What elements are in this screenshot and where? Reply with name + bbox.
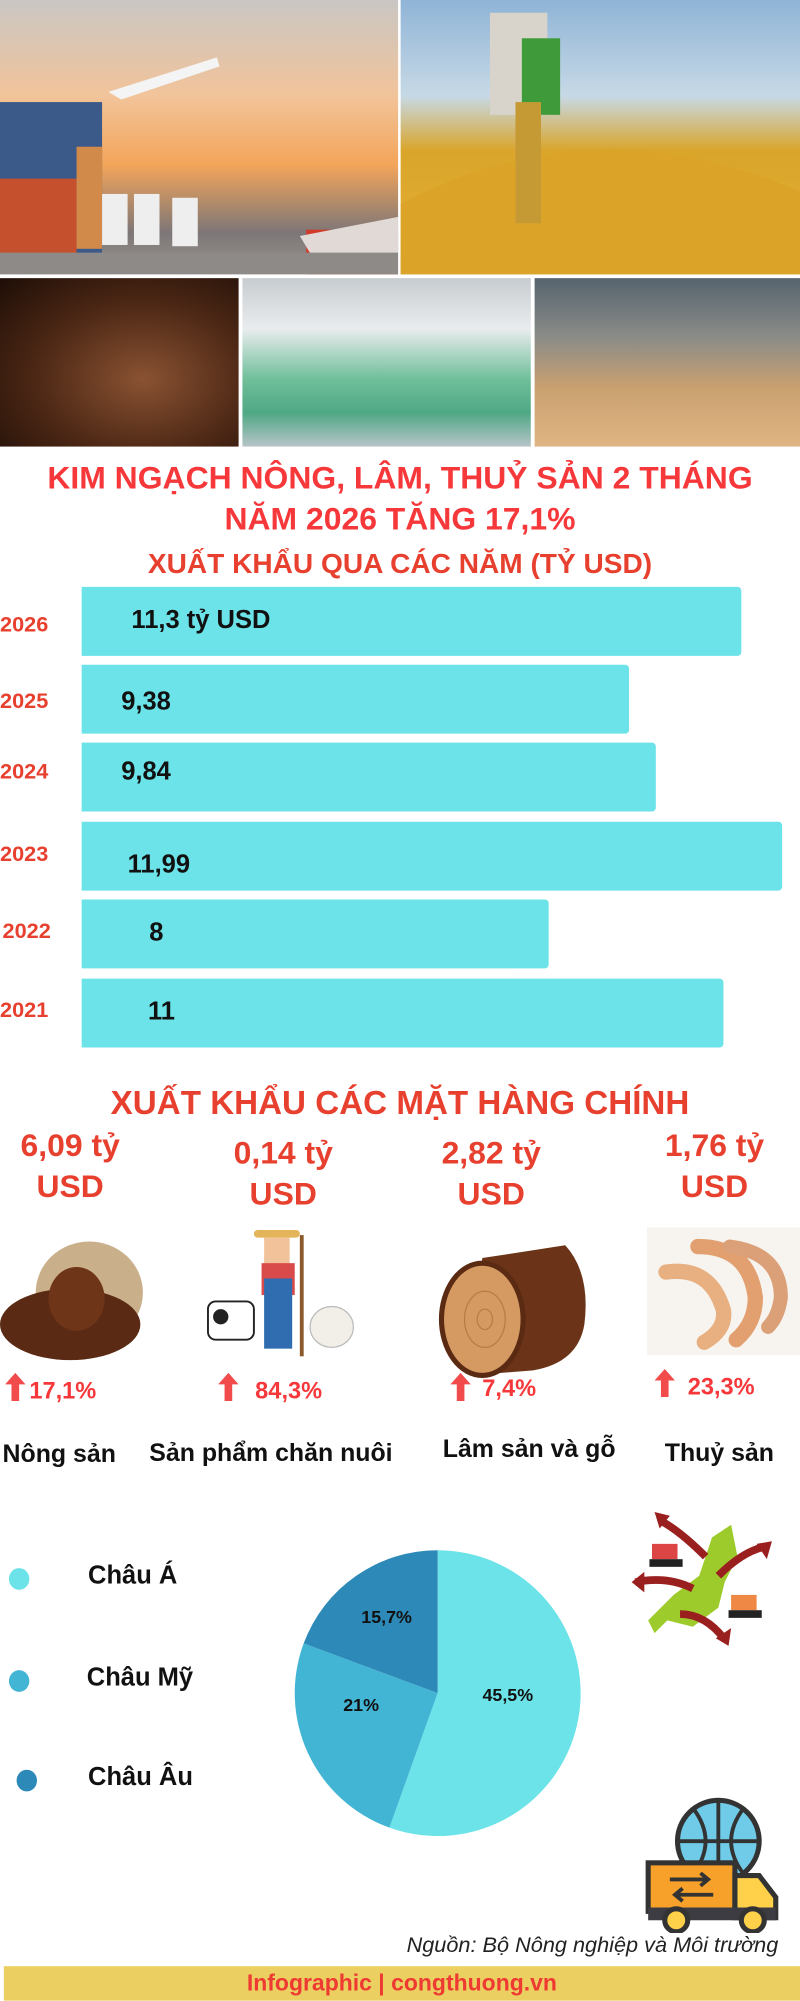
legend: Châu Mỹ (87, 1664, 193, 1692)
title: NĂM 2026 TĂNG 17,1% (224, 501, 575, 537)
product: Nông sản: 6,09 tỷ (21, 1128, 120, 1164)
icon: delivery truck with globe (646, 1798, 778, 1933)
photo: port logistics (0, 0, 398, 274)
product: Nông sản: 17,1% (29, 1377, 96, 1404)
footer: Infographic | congthuong.vn (247, 1970, 557, 1996)
subtitle: XUẤT KHẨU QUA CÁC NĂM (TỶ USD) (148, 547, 652, 579)
source note: Nguồn: Bộ Nông nghiệp và Môi trường (407, 1933, 778, 1957)
pie chart (294, 1550, 581, 1836)
legend: Châu Á (88, 1562, 177, 1590)
title: KIM NGẠCH NÔNG, LÂM, THUỶ SẢN 2 THÁNG (47, 461, 753, 496)
product: Nông sản (0, 1128, 143, 1469)
bar chart: 11 (148, 998, 175, 1026)
icon: export map (632, 1512, 772, 1646)
product: Thuỷ sản: Thuỷ sản (665, 1439, 774, 1467)
pie chart: 45,5% (482, 1685, 533, 1705)
footer (4, 1966, 800, 2001)
legend: Châu Âu (88, 1763, 193, 1791)
bar chart: 9,38 (121, 688, 171, 716)
product: Lâm sản và gỗ (438, 1136, 616, 1463)
product: Thuỷ sản: USD (681, 1169, 748, 1204)
bar chart: 2025 (0, 689, 48, 713)
bar chart: 2022 (3, 919, 51, 943)
product: Sản phẩm chăn nuôi (149, 1136, 393, 1467)
product: Lâm sản và gỗ: USD (458, 1176, 525, 1212)
bar chart: 11,99 (128, 851, 190, 879)
product: Nông sản: Nông sản (3, 1441, 116, 1469)
product: Thuỷ sản: 1,76 tỷ (665, 1128, 764, 1164)
product: Lâm sản và gỗ: 2,82 tỷ (442, 1136, 541, 1171)
pie chart: 21% (343, 1695, 379, 1715)
photo: rice harvest (401, 0, 800, 274)
product: Sản phẩm chăn nuôi: Sản phẩm chăn nuôi (149, 1439, 393, 1467)
heading: main products: XUẤT KHẨU CÁC MẶT HÀNG CHÍNH (111, 1083, 689, 1122)
product: Thuỷ sản: 23,3% (688, 1373, 755, 1400)
title (47, 460, 753, 537)
product: Nông sản: USD (36, 1169, 104, 1204)
product: Sản phẩm chăn nuôi: USD (250, 1176, 317, 1212)
bar chart: 11,3 tỷ USD (131, 606, 270, 634)
photo: seafood processing (242, 278, 531, 447)
bar chart: 2026 (0, 612, 48, 637)
photo: wood factory (535, 278, 800, 447)
bar chart: 9,84 (121, 758, 171, 786)
bar chart: 2024 (0, 759, 48, 783)
bar chart: 2023 (0, 842, 48, 866)
bar chart: 8 (149, 919, 163, 947)
photo: coffee beans (0, 278, 239, 447)
product: Lâm sản và gỗ: Lâm sản và gỗ (443, 1435, 616, 1463)
pie chart: 15,7% (361, 1607, 412, 1627)
bar chart: 2021 (0, 998, 48, 1022)
product: Thuỷ sản (647, 1128, 800, 1467)
legend (8, 1560, 193, 1792)
bar chart (0, 586, 782, 1048)
product: Sản phẩm chăn nuôi: 84,3% (255, 1377, 322, 1404)
product: Lâm sản và gỗ: 7,4% (482, 1374, 536, 1401)
product: Sản phẩm chăn nuôi: 0,14 tỷ (234, 1136, 333, 1171)
